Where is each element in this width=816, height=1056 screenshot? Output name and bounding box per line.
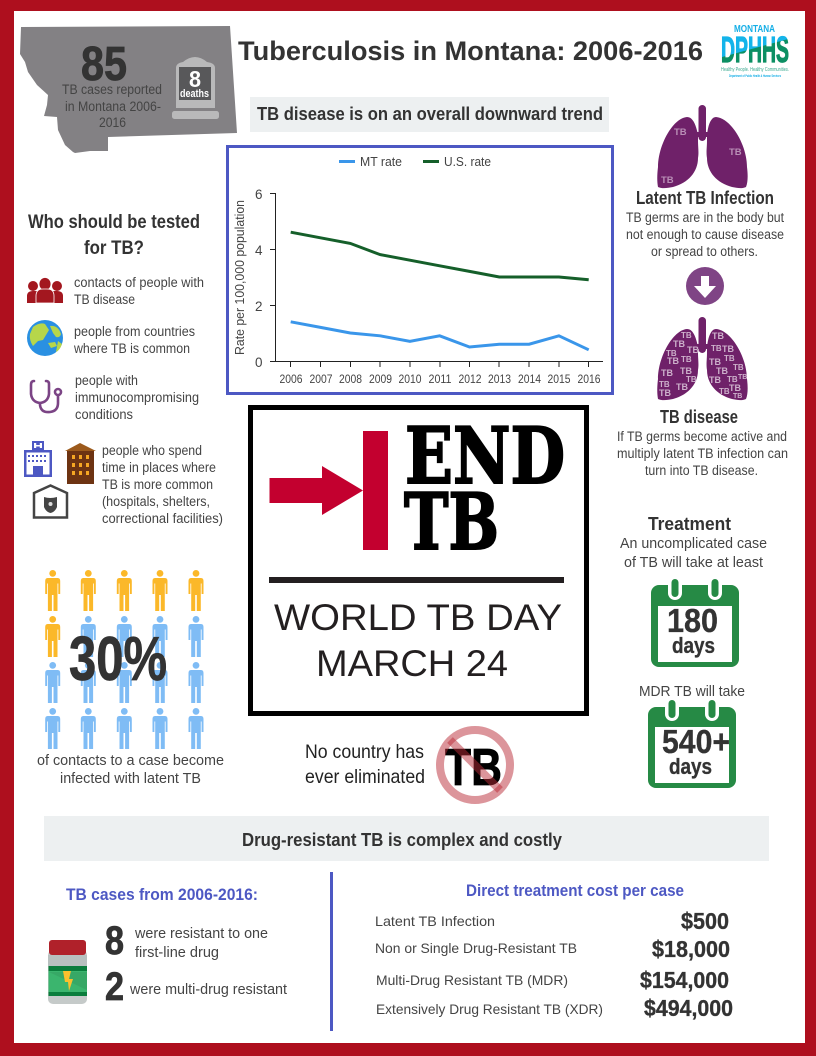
panel: latent TB infection — [626, 105, 784, 259]
x axis labels: 2007 — [310, 374, 332, 386]
logo: Montana DPHHS: Healthy People. Healthy Communities. — [721, 67, 789, 73]
icon: lungs disease: TB — [680, 366, 692, 376]
icon: lungs disease: TB — [738, 374, 747, 381]
panel: Montana summary — [20, 26, 237, 153]
heading: who should be tested — [28, 212, 200, 259]
icon: calendar 540+ days: days — [669, 754, 712, 779]
x axis labels — [280, 374, 600, 386]
text: World TB Day March 24: WORLD TB DAY — [274, 597, 562, 638]
row: latent — [375, 908, 729, 934]
stat: 2 multi-drug resistant: were multi-drug resistant — [129, 982, 287, 998]
text: cases reported — [62, 82, 162, 130]
icon: globe — [27, 320, 63, 356]
icon: lungs disease: TB — [709, 357, 721, 367]
stat: 8 drug resistant: first-line drug — [135, 945, 219, 961]
text: contacts — [74, 275, 204, 307]
x axis labels: 2010 — [398, 374, 422, 386]
x axis labels: 2015 — [548, 374, 570, 386]
x axis labels: 2016 — [578, 374, 600, 386]
icon: tombstone with deaths — [172, 57, 219, 119]
text: places: correctional facilities) — [102, 511, 223, 526]
logo text: END TB: END — [405, 411, 565, 502]
x axis labels: 2009 — [369, 374, 392, 386]
icon: lungs disease: TB — [716, 366, 728, 376]
icon: Montana map — [20, 26, 237, 153]
icon: lungs latent: TB — [729, 147, 742, 158]
x axis labels: 2006 — [280, 374, 302, 386]
icon: hospital — [24, 441, 52, 477]
legend: MT rate — [360, 155, 402, 169]
text: contacts: contacts of people with — [74, 275, 204, 290]
text: places: TB is more common — [102, 477, 213, 492]
icon: lungs latent — [657, 105, 748, 188]
row: MDR: $154,000 — [640, 967, 729, 993]
text: places: people who spend — [102, 443, 202, 458]
icon: lungs disease: TB — [659, 380, 670, 389]
icon: lungs disease: TB — [712, 331, 724, 341]
stat: 8 drug resistant — [105, 919, 268, 963]
text: latent description: TB germs are in the body but — [626, 210, 784, 225]
text: countries: people from countries — [74, 324, 195, 339]
heading: drug-resistant TB: Drug-resistant TB is complex and costly — [242, 830, 562, 850]
heading: latent TB infection: Latent TB Infection — [636, 188, 774, 208]
text: countries — [73, 324, 195, 356]
stat: 2 multi-drug resistant: 2 — [105, 965, 124, 1009]
icon: lungs latent: TB — [661, 175, 674, 186]
text: disease description: turn into TB disease. — [645, 463, 758, 478]
heading: downward trend — [250, 97, 609, 132]
axes — [270, 193, 603, 367]
stat: 8 drug resistant: were resistant to one — [134, 926, 268, 942]
heading: treatment: Treatment — [648, 514, 731, 534]
text: World TB Day March 24 — [274, 597, 562, 684]
panel: End TB World TB Day — [250, 408, 586, 714]
heading: treatment cost: Direct treatment cost per case — [466, 881, 684, 900]
line: MT rate — [291, 322, 589, 350]
row: MDR — [376, 967, 729, 993]
panel: 30 percent of contacts — [37, 570, 224, 787]
panel: who should be tested — [24, 212, 223, 526]
y axis labels — [233, 186, 263, 370]
x axis labels: 2011 — [428, 374, 452, 386]
text: contacts infected: infected with latent TB — [60, 770, 201, 787]
panel: direct treatment cost — [375, 881, 733, 1021]
row: latent: $500 — [681, 908, 729, 934]
text: immunocompromising: immunocompromising — [75, 390, 199, 405]
icon: contacts — [27, 278, 63, 303]
icon: lungs disease: TB — [733, 393, 742, 400]
icon: tombstone with deaths: 8 — [189, 66, 201, 92]
panel: TB disease — [617, 317, 788, 478]
text: MDR TB will take: MDR TB will take — [639, 683, 745, 700]
chart: TB rates line chart — [228, 146, 612, 394]
text: cases reported: 2016 — [99, 115, 126, 130]
legend: U.S. rate — [444, 155, 491, 169]
text: uncomplicated case: An uncomplicated case — [620, 535, 767, 552]
icon: red arrow and bar — [270, 431, 388, 550]
arrow: latent to disease — [686, 267, 724, 305]
row: XDR — [376, 995, 733, 1021]
logo: Montana DPHHS — [721, 23, 789, 78]
icon: stethoscope — [31, 381, 61, 412]
text: latent description: or spread to others. — [651, 244, 758, 259]
text: World TB Day March 24: MARCH 24 — [316, 643, 508, 684]
row: non or single: Non or Single Drug-Resistant TB — [375, 940, 577, 956]
title: Tuberculosis in Montana: 2006-2016 — [238, 36, 703, 66]
text: immunocompromising: people with — [75, 373, 138, 388]
text: latent description — [626, 210, 784, 259]
icon: lungs disease — [657, 317, 748, 400]
icon: calendar 180 days — [651, 577, 739, 667]
logo text: END TB — [404, 411, 565, 568]
pictogram: 6 of 20 people — [45, 570, 204, 749]
icon: lungs disease: TB — [711, 344, 722, 353]
row: MDR: Multi-Drug Resistant TB (MDR) — [376, 972, 568, 988]
text: uncomplicated case — [620, 535, 767, 571]
row: non or single — [375, 936, 730, 962]
logo text: END TB: TB — [404, 477, 499, 568]
text: contacts infected — [37, 752, 224, 787]
text: uncomplicated case: of TB will take at least — [624, 554, 764, 571]
y axis labels: 6 — [255, 186, 263, 202]
icon: lungs disease: TB — [727, 375, 738, 384]
text: cases reported: TB cases reported — [62, 82, 162, 97]
icon: calendar 540+ days: 540+ — [662, 723, 730, 760]
text: immunocompromising: conditions — [75, 407, 133, 422]
icon: lungs disease: TB — [667, 356, 679, 366]
heading: who should be tested: for TB? — [84, 238, 144, 259]
legend — [339, 155, 491, 169]
icon: lungs disease: TB — [666, 349, 677, 358]
icon: medicine bottle — [48, 940, 87, 1004]
heading: downward trend: TB disease is on an overall downward trend — [257, 104, 603, 124]
heading: TB cases: TB cases from 2006-2016: — [66, 885, 258, 904]
logo: Montana DPHHS: Department of Public Health & Human Services — [729, 74, 781, 78]
icon: lungs disease: TB — [673, 339, 685, 349]
stat: 85 cases: 85 — [81, 38, 127, 91]
icon: lungs disease: TB — [681, 331, 692, 340]
x axis labels: 2013 — [488, 374, 511, 386]
heading: TB disease: TB disease — [660, 407, 738, 427]
row: latent: Latent TB Infection — [375, 913, 495, 929]
text: disease description — [617, 429, 788, 478]
x axis labels: 2008 — [339, 374, 362, 386]
icon: lungs disease: TB — [687, 345, 699, 355]
icon: lungs disease: TB — [722, 344, 734, 354]
icon: lungs disease: TB — [686, 375, 697, 384]
text: places: time in places where — [102, 460, 216, 475]
panel: TB cases 2006-2016 — [48, 885, 287, 1009]
icon: tombstone with deaths: deaths — [180, 88, 209, 100]
text: immunocompromising — [75, 373, 199, 422]
x axis labels: 2012 — [458, 374, 482, 386]
y axis labels: Rate per 100,000 population — [233, 200, 247, 355]
icon: lungs disease: TB — [659, 388, 671, 398]
y axis labels: 2 — [255, 298, 263, 314]
icon: calendar 180 days: days — [672, 633, 715, 658]
icon: lungs disease: TB — [733, 363, 744, 372]
heading: drug-resistant TB — [44, 816, 769, 861]
x axis labels: 2014 — [518, 374, 542, 386]
icon: prohibited TB: TB — [445, 739, 502, 797]
text: contacts infected: of contacts to a case become — [37, 752, 224, 769]
icon: calendar 540+ days — [648, 698, 736, 788]
text: disease description: If TB germs become active and — [617, 429, 787, 444]
row: XDR: Extensively Drug Resistant TB (XDR) — [376, 1001, 603, 1017]
icon: shelter building — [65, 443, 96, 484]
icon: lungs disease: TB — [724, 354, 735, 363]
icon: lungs disease: TB — [676, 382, 688, 392]
text: cases reported: in Montana 2006- — [65, 99, 161, 114]
text: no country — [305, 741, 425, 788]
icon: lungs disease: TB — [661, 368, 673, 378]
text: countries: where TB is common — [73, 341, 190, 356]
text: no country: ever eliminated — [305, 766, 425, 788]
text: places: (hospitals, shelters, — [102, 494, 210, 509]
stat: 8 drug resistant: 8 — [105, 919, 124, 963]
panel: treatment — [620, 514, 767, 788]
row: non or single: $18,000 — [652, 936, 730, 962]
row: XDR: $494,000 — [644, 995, 733, 1021]
logo: Montana DPHHS: MONTANA — [734, 23, 775, 35]
icon: lungs disease: TB — [719, 387, 730, 396]
stat: 2 multi-drug resistant — [105, 965, 287, 1009]
icon: lungs disease: TB — [681, 355, 692, 364]
text: latent description: not enough to cause disease — [626, 227, 784, 242]
heading: who should be tested: Who should be tested — [28, 212, 200, 233]
icon: correctional facility — [34, 486, 67, 518]
icon: calendar 180 days: 180 — [667, 602, 718, 639]
callout: no country has eliminated TB — [305, 730, 510, 800]
y axis labels: 0 — [255, 354, 263, 370]
icon: lungs disease: TB — [729, 383, 741, 393]
stat: 30%: 30% — [69, 625, 167, 694]
text: contacts: TB disease — [74, 292, 135, 307]
text: places — [102, 443, 223, 526]
y axis labels: 4 — [255, 242, 263, 258]
text: disease description: multiply latent TB infection can — [617, 446, 788, 461]
text: no country: No country has — [305, 741, 424, 763]
line: U.S. rate — [291, 232, 589, 280]
icon: lungs disease: TB — [709, 375, 721, 385]
icon: lungs latent: TB — [674, 127, 687, 138]
